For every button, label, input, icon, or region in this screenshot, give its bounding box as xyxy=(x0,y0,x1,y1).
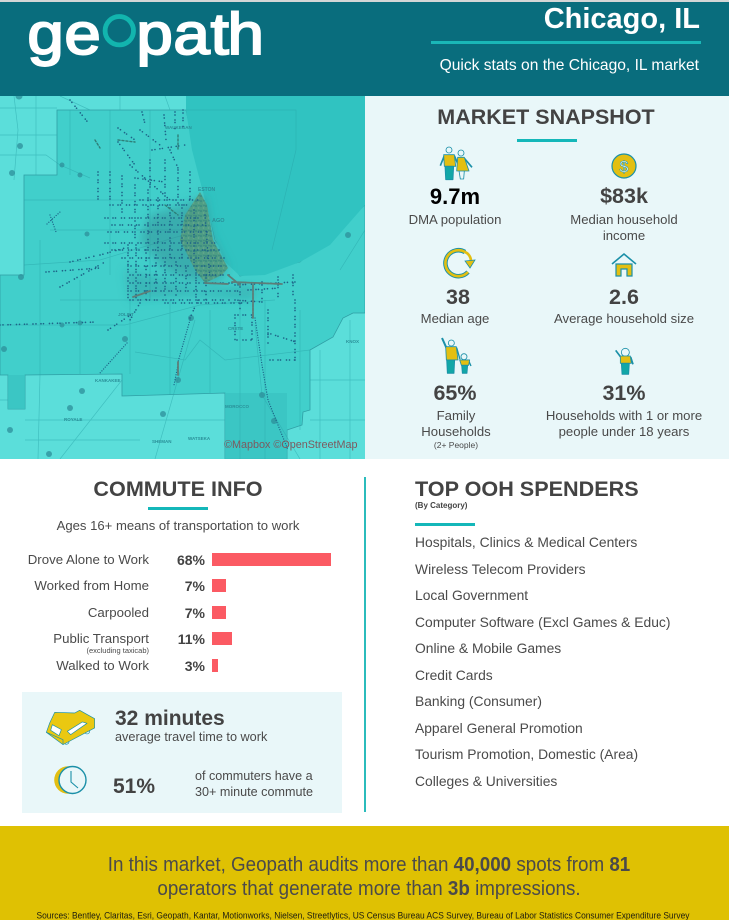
road shields and place labels: SHEMAN xyxy=(152,439,172,444)
Lake Michigan xyxy=(186,96,365,276)
stat: family households: (2+ People) xyxy=(434,440,478,450)
road shields and place labels: WATSEKA xyxy=(188,436,211,441)
dense urban haze xyxy=(125,195,255,300)
row: walked xyxy=(56,658,218,674)
list: spender categories: Local Government xyxy=(415,587,528,603)
logo: geopath xyxy=(27,2,264,67)
stat: median age: Median age xyxy=(421,311,489,326)
list: spender categories: Banking (Consumer) xyxy=(415,693,542,709)
stat: median age: 38 xyxy=(446,285,470,309)
heading: market snapshot: MARKET SNAPSHOT xyxy=(437,105,655,129)
icon: house xyxy=(612,253,636,277)
label: 30+ minute commute: 30+ minute commute xyxy=(195,784,313,798)
row: carpooled: 7% xyxy=(185,605,205,621)
DMA region xyxy=(0,110,365,459)
road shields and place labels: KANKAKEE xyxy=(95,378,121,383)
list: spender categories: Hospitals, Clinics & Medical Centers xyxy=(415,534,637,550)
heading: top OOH spenders: TOP OOH SPENDERS xyxy=(415,476,639,501)
icon: parent and child xyxy=(441,338,472,374)
stat: 51%: 51% xyxy=(113,775,155,798)
map of the Chicago DMA xyxy=(0,96,365,459)
row: worked from home: Worked from Home xyxy=(34,578,149,593)
stat: median age xyxy=(421,285,489,326)
stat: DMA population xyxy=(409,184,501,227)
row: public transport: (excluding taxicab) xyxy=(86,646,149,655)
title: Chicago, IL: Chicago, IL xyxy=(544,3,700,35)
panel: top OOH spenders xyxy=(415,476,639,526)
summary text: operators that generate more than 3b impressions. xyxy=(157,878,581,900)
stat: average household size xyxy=(554,285,694,326)
row: walked: 3% xyxy=(185,658,205,674)
list: spender categories: Computer Software (Excl Games & Educ) xyxy=(415,614,670,630)
label: 30+ minute commute xyxy=(195,769,313,798)
heading rule xyxy=(415,523,475,526)
subheading: Ages 16+ means of transportation to work xyxy=(57,518,299,533)
road network xyxy=(0,96,365,459)
road shields and place labels: MOROCCO xyxy=(225,404,249,409)
road shields and place labels: WAUKEGAN xyxy=(165,125,192,130)
stat: 32 minutes: 32 minutes xyxy=(115,707,225,730)
row: drove alone: Drove Alone to Work xyxy=(28,552,149,567)
title rule xyxy=(431,41,701,44)
stat: family households: 65% xyxy=(433,381,477,405)
road shields and place labels: ROYALE xyxy=(64,417,82,422)
label: average travel time: average travel time to work xyxy=(115,730,267,744)
stat: DMA population: 9.7m xyxy=(430,184,480,209)
road shields and place labels: ESTON xyxy=(198,187,216,193)
row: public transport: 11% xyxy=(178,631,205,647)
row: drove alone: 68% xyxy=(177,552,205,568)
logo: geopath: path xyxy=(136,2,264,67)
icon: dollar coin: $ xyxy=(620,159,629,176)
row: carpooled xyxy=(88,605,226,621)
road shields and place labels: JOLIET xyxy=(118,312,134,317)
heading rule xyxy=(517,139,577,142)
panel: market snapshot xyxy=(365,96,729,459)
stat: households with children: 31% xyxy=(602,381,646,405)
stat: family households: Family xyxy=(437,408,475,423)
summary text xyxy=(108,854,630,900)
logo: geopath: ge xyxy=(27,2,101,67)
summary text: In this market, Geopath audits more than 40,000 spots from 81 xyxy=(108,854,630,876)
label: 30+ minute commute: of commuters have a xyxy=(195,769,313,783)
icon: age cycle arrow xyxy=(443,248,476,278)
audited OOH spots xyxy=(0,100,296,450)
bar chart: means of transport xyxy=(28,552,331,674)
stat: households with children: people under 18 years xyxy=(559,424,689,439)
list: spender categories: Online & Mobile Games xyxy=(415,640,561,656)
column divider xyxy=(364,477,366,812)
list: spender categories xyxy=(415,534,670,789)
row: drove alone xyxy=(28,552,331,568)
road shields and place labels xyxy=(1,92,359,457)
row: public transport: Public Transport xyxy=(53,631,149,646)
stat: average household size: 2.6 xyxy=(609,285,639,309)
stat: median household income: Median household xyxy=(570,212,678,227)
row: worked from home xyxy=(34,578,226,594)
row: walked: Walked to Work xyxy=(56,658,149,673)
downtown speckle xyxy=(180,192,228,283)
icon: couple xyxy=(440,146,473,180)
row: public transport xyxy=(53,631,232,655)
heading rule xyxy=(148,507,208,510)
stat: median household income: $83k xyxy=(600,184,648,208)
icon: dollar coin xyxy=(611,153,637,179)
stat: median household income: income xyxy=(603,228,645,243)
road shields and place labels: AGO xyxy=(212,218,225,224)
stat: family households: Households xyxy=(421,424,491,439)
heading: commute info: COMMUTE INFO xyxy=(93,476,263,501)
list: spender categories: Tourism Promotion, Domestic (Area) xyxy=(415,746,638,762)
footer band xyxy=(0,826,729,920)
subtitle: Quick stats on the Chicago, IL market xyxy=(440,57,699,74)
header band xyxy=(0,0,729,96)
list: spender categories: Credit Cards xyxy=(415,667,493,683)
stat: family households xyxy=(421,381,491,450)
stat: average household size: Average household size xyxy=(554,311,694,326)
road shields and place labels: CRETE xyxy=(228,326,243,331)
row: carpooled: Carpooled xyxy=(88,605,149,620)
stat: households with children: Households with 1 or more xyxy=(546,408,702,423)
stat: households with children xyxy=(546,381,702,439)
icon: car xyxy=(46,710,95,745)
map attribution: ©Mapbox ©OpenStreetMap xyxy=(224,439,358,451)
list: spender categories: Apparel General Promotion xyxy=(415,720,583,736)
icon: child xyxy=(615,348,634,375)
panel: commute info xyxy=(22,476,342,813)
icon: clock xyxy=(54,766,87,794)
stat: median household income xyxy=(570,184,678,243)
subheading: by category: (By Category) xyxy=(415,501,467,510)
road shields and place labels: KNOX xyxy=(346,339,359,344)
list: spender categories: Wireless Telecom Providers xyxy=(415,561,586,577)
stat: DMA population: DMA population xyxy=(409,212,501,227)
list: spender categories: Colleges & Universities xyxy=(415,773,557,789)
callout: travel time xyxy=(22,692,342,813)
row: worked from home: 7% xyxy=(185,578,205,594)
